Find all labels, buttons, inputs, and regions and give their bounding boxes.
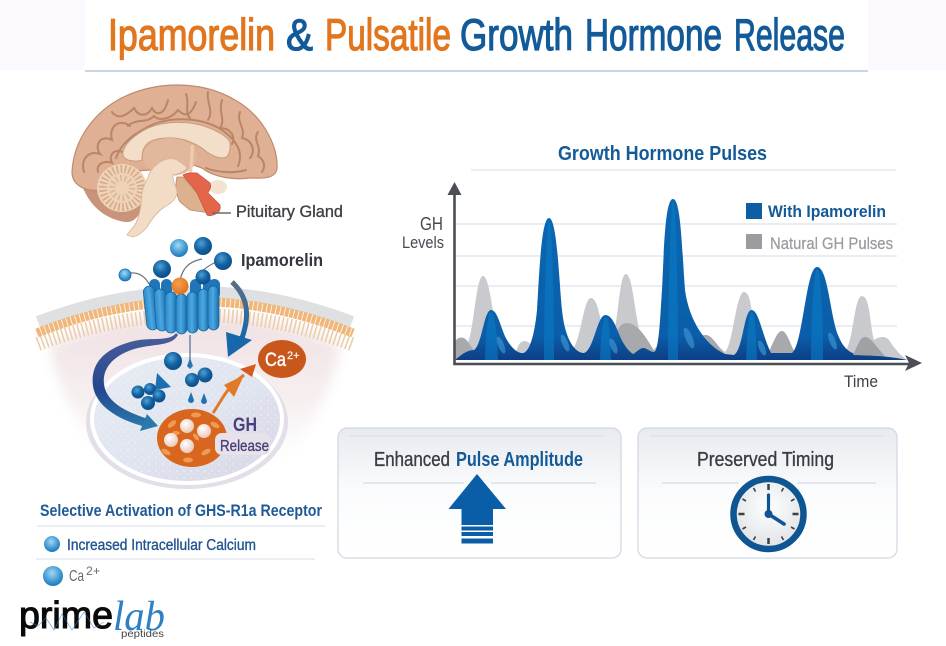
receptor helices <box>143 285 219 334</box>
calcium badge: Ca <box>265 350 286 371</box>
calcium badge: 2+ <box>287 350 300 362</box>
cerebellum <box>97 164 147 212</box>
legend <box>746 203 893 253</box>
title: & <box>286 11 313 60</box>
card heading: Enhanced <box>374 448 450 471</box>
key item: Ca2+ <box>43 566 100 586</box>
pituitary gland <box>183 173 220 216</box>
line chart: growth hormone pulses <box>448 170 922 371</box>
legend: natural pulses: Natural GH Pulses <box>770 235 893 253</box>
label: pituitary gland: Pituitary Gland <box>236 202 343 221</box>
brain illustration <box>72 85 277 237</box>
header band <box>0 0 946 72</box>
key item: Ca2+: Ca <box>69 568 84 585</box>
title: Ipamorelin <box>108 11 275 60</box>
key item: calcium: Increased Intracellular Calcium <box>67 537 256 554</box>
natural pulses series <box>455 274 907 360</box>
logo: prime <box>19 595 113 637</box>
y axis label: GH <box>420 214 443 234</box>
arrow: receptor to granule <box>93 333 178 431</box>
GH granule <box>157 409 227 467</box>
card heading: Preserved Timing <box>697 448 834 471</box>
label: ipamorelin: Ipamorelin <box>241 250 323 270</box>
hypothalamus region <box>176 177 210 213</box>
logo: peptides <box>121 629 164 640</box>
cerebrum <box>72 85 277 190</box>
pointer line <box>212 212 231 214</box>
GH release label: Release <box>220 438 269 455</box>
key item: Ca2+: 2+ <box>86 566 100 578</box>
logo <box>19 594 165 640</box>
x axis label: Time <box>844 372 878 391</box>
y axis label: Levels <box>402 233 444 252</box>
thalamus <box>143 138 197 176</box>
receptor and ipamorelin molecules <box>119 237 232 334</box>
title: Growth <box>460 11 573 60</box>
last natural bump in front <box>853 337 885 356</box>
lower rim under cerebellum <box>80 168 146 222</box>
arrow: calcium release <box>213 364 256 413</box>
corpus callosum <box>123 122 230 161</box>
icon: up arrow <box>448 474 506 544</box>
receptor heading: Selective Activation of GHS-R1a Receptor <box>40 501 322 520</box>
molecule tethers <box>130 259 216 288</box>
panel: enhanced pulse amplitude <box>338 428 621 558</box>
logo: lab <box>113 594 165 640</box>
legend: with ipamorelin: With Ipamorelin <box>768 203 886 221</box>
calcium badge <box>258 340 306 378</box>
panel: preserved timing <box>638 428 897 558</box>
y axis label <box>402 214 444 252</box>
brainstem <box>127 159 187 237</box>
white blob <box>209 180 227 194</box>
title: Hormone <box>585 11 722 60</box>
darker overlap bumps <box>455 323 796 360</box>
gyri folds <box>83 92 264 172</box>
signalling molecules in nucleus <box>132 335 212 410</box>
key list <box>36 526 325 586</box>
GH release label <box>215 415 270 455</box>
with ipamorelin series <box>455 199 907 360</box>
GH release label: GH <box>233 415 257 436</box>
chart heading: Growth Hormone Pulses <box>558 143 767 165</box>
nucleus <box>86 355 288 489</box>
stalk <box>189 145 194 176</box>
title <box>108 11 845 60</box>
title: Release <box>734 11 845 60</box>
icon: clock <box>734 479 804 549</box>
card heading <box>374 448 583 471</box>
highlight leaves <box>495 326 839 357</box>
title: Pulsatile <box>325 11 451 60</box>
arrow: into nucleus <box>226 282 252 357</box>
bright peak highlights <box>485 201 823 360</box>
receptor back caps <box>149 279 220 299</box>
card heading: Pulse Amplitude <box>456 448 583 471</box>
cell cytoplasm and membrane <box>37 292 353 460</box>
axes <box>448 182 922 371</box>
